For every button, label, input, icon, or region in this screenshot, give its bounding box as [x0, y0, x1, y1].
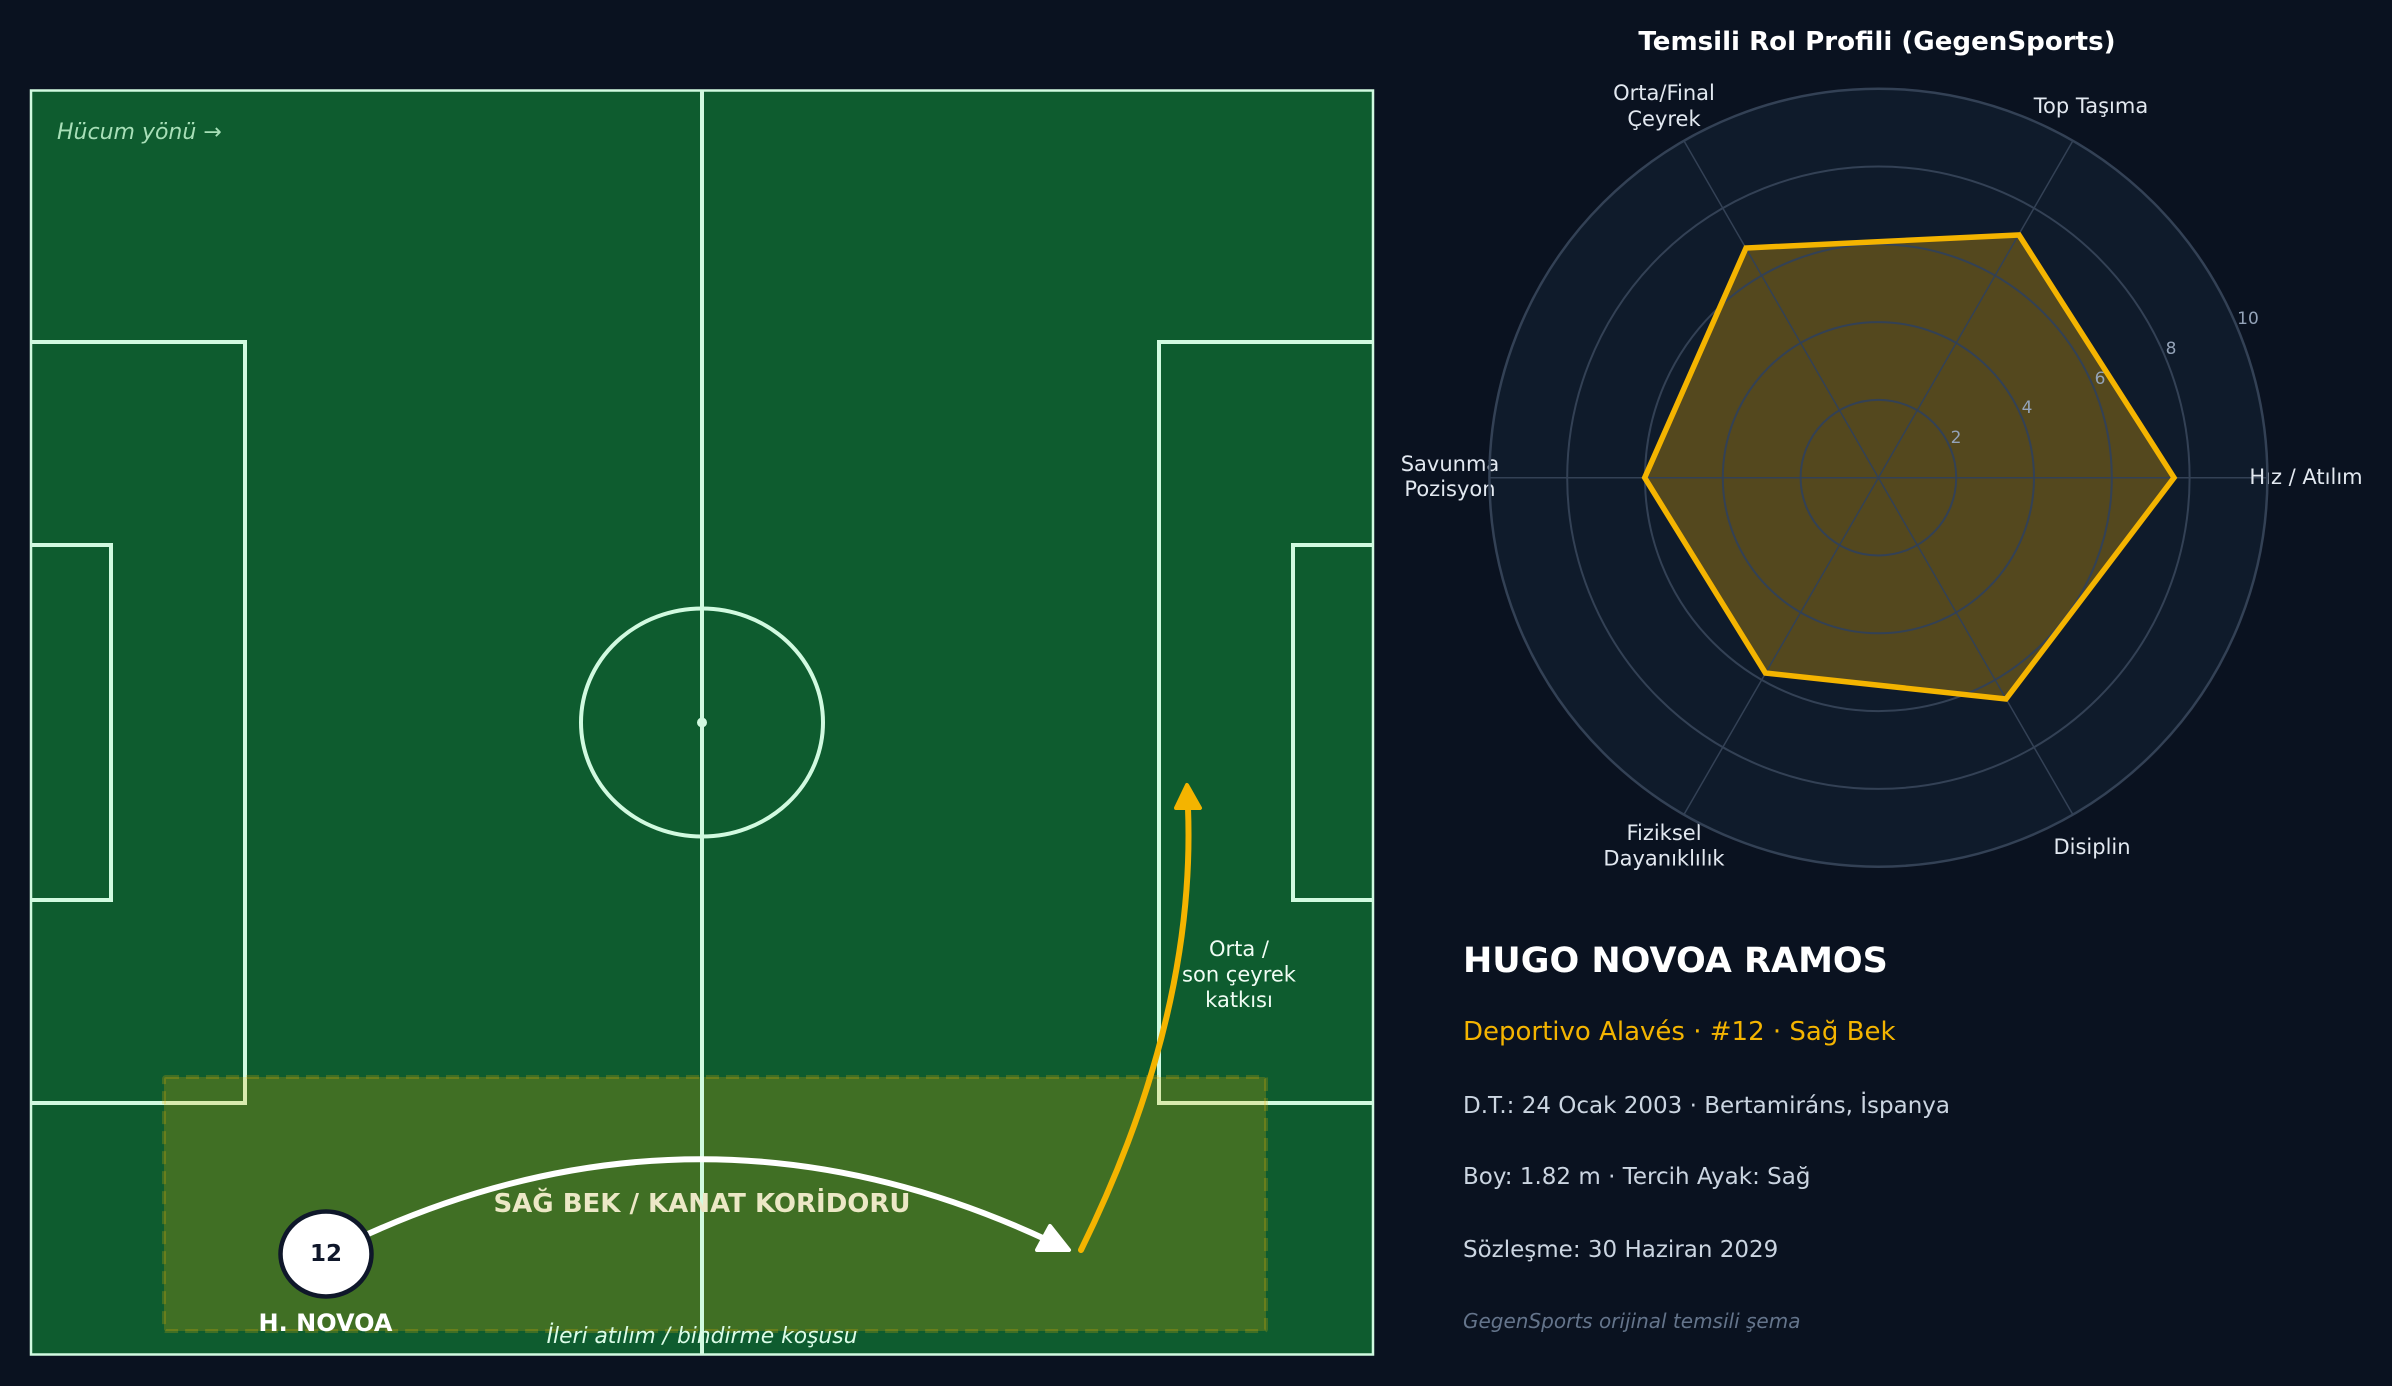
radar data fill	[1645, 235, 2174, 699]
run caption: İleri atılım / bindirme koşusu	[547, 1323, 857, 1349]
player marker	[280, 1212, 372, 1296]
right goal area	[1293, 545, 1384, 900]
contract: Sözleşme: 30 Haziran 2029	[1463, 1237, 1778, 1263]
pitch surface	[31, 90, 1373, 1355]
radar tick labels: 4	[2022, 398, 2032, 418]
height and foot: Boy: 1.82 m · Tercih Ayak: Sağ	[1463, 1164, 1810, 1190]
radar tick labels: 6	[2095, 369, 2105, 389]
radar axis labels: Pozisyon	[1404, 477, 1496, 501]
player full name: HUGO NOVOA RAMOS	[1463, 941, 1888, 981]
radar tick labels: 2	[1951, 428, 1961, 448]
radar axis labels: Orta/Final	[1613, 81, 1715, 105]
player name: H. NOVOA	[259, 1309, 393, 1337]
source note: GegenSports orijinal temsili şema	[1463, 1309, 1800, 1333]
radar axis labels: Çeyrek	[1627, 107, 1701, 131]
radar axis labels: Savunma	[1401, 452, 1499, 476]
radar axis labels	[1401, 81, 2363, 870]
right-back corridor zone	[164, 1077, 1266, 1331]
left goal area	[20, 545, 111, 900]
radar data outline	[1645, 235, 2174, 699]
panel: player information	[1463, 941, 1950, 1333]
arrow: forward run	[326, 1159, 1069, 1254]
attack direction note: Hücum yönü →	[57, 120, 222, 145]
radar tick labels	[1951, 309, 2259, 448]
radar outer ring	[1489, 89, 2267, 867]
birth info: D.T.: 24 Ocak 2003 · Bertamiráns, İspanya	[1463, 1091, 1950, 1119]
radar axis labels: Dayanıklılık	[1603, 846, 1725, 870]
radar tick labels: 8	[2166, 339, 2176, 359]
arrow label: Orta /	[1209, 937, 1270, 961]
radar chart title: Temsili Rol Profili (GegenSports)	[1638, 27, 2116, 57]
zone label: SAĞ BEK / KANAT KORİDORU	[493, 1187, 911, 1219]
player marker: 12	[310, 1241, 342, 1267]
radar axis labels: Top Taşıma	[2033, 94, 2148, 118]
radar disk	[1489, 89, 2267, 867]
radar tick labels: 10	[2237, 309, 2259, 329]
radar axis labels: Hız / Atılım	[2249, 465, 2363, 489]
centre spot	[697, 718, 707, 728]
radar grid	[1489, 141, 2267, 815]
centre circle	[581, 608, 823, 836]
halfway line	[700, 90, 704, 1355]
left penalty area	[20, 342, 245, 1103]
panel: radar chart	[1401, 81, 2363, 870]
radar axis labels: Fiziksel	[1626, 821, 1702, 845]
club and position: Deportivo Alavés · #12 · Sağ Bek	[1463, 1017, 1896, 1047]
pitch border	[31, 90, 1373, 1354]
arrow label: son çeyrek	[1182, 962, 1297, 986]
arrow label: katkısı	[1205, 988, 1273, 1012]
arrow: final third contribution	[1081, 785, 1200, 1250]
right penalty area	[1159, 342, 1384, 1103]
radar axis labels: Disiplin	[2053, 835, 2131, 859]
